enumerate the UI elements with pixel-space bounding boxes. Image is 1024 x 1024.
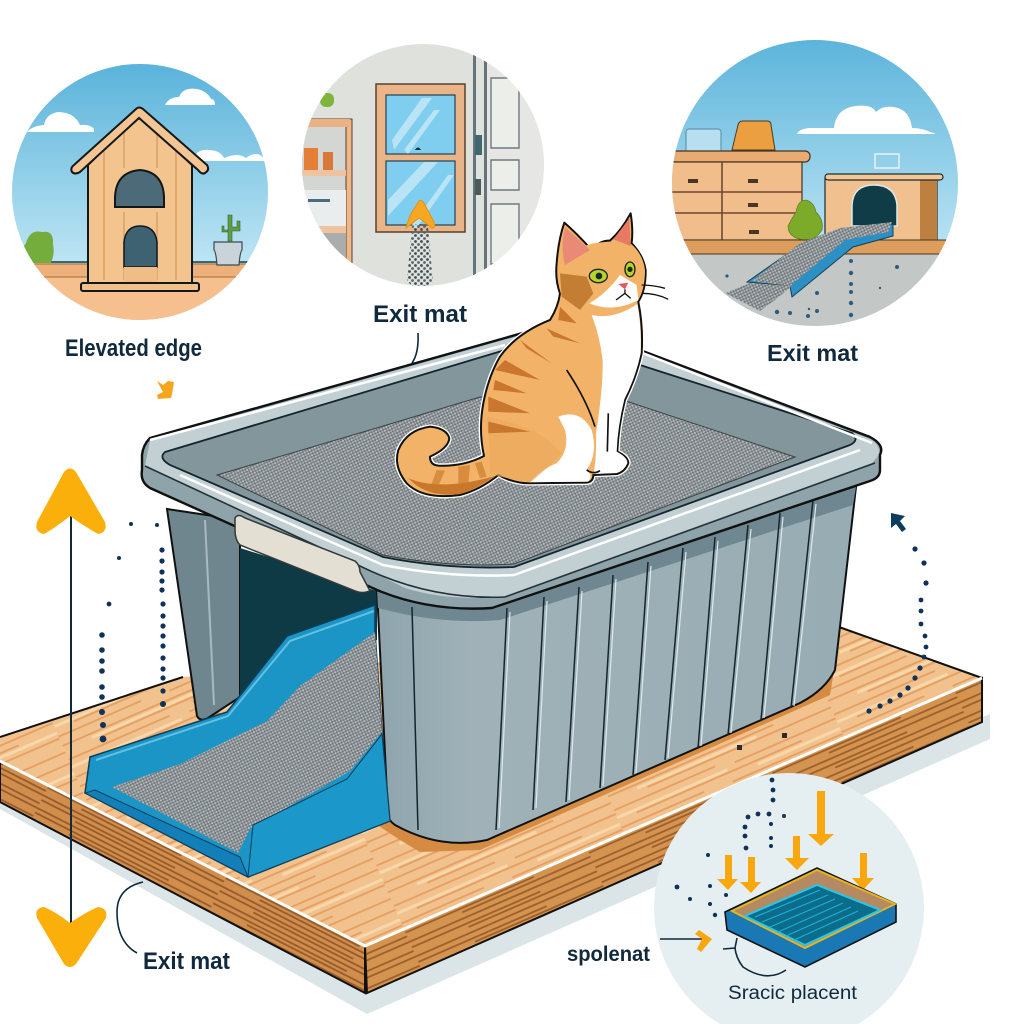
- litter crumbs: [737, 733, 787, 750]
- cat chest: [592, 304, 641, 474]
- cat outline: [397, 213, 646, 496]
- handle: [235, 516, 370, 592]
- interior walls: [162, 340, 856, 568]
- falling dots: [675, 778, 786, 917]
- blue tray: [725, 868, 896, 967]
- box front body: [377, 487, 856, 843]
- dark opening: [240, 548, 377, 700]
- drop arrows: [717, 791, 874, 893]
- icon: small orange arrow: [157, 381, 174, 399]
- pointer arrow to tray: [660, 930, 712, 952]
- dimension arrow: height: [36, 468, 106, 967]
- panel: mat placement inset: [654, 773, 924, 1024]
- label: elevated edge: Elevated edge: [65, 335, 202, 362]
- dotted path left: [99, 522, 166, 742]
- litter bed: [217, 397, 795, 565]
- dotted arrow right: [866, 513, 929, 714]
- label: exit mat bottom: Exit mat: [143, 948, 230, 975]
- litter box: [142, 321, 881, 843]
- shadow under box: [190, 665, 835, 852]
- rim outer: [142, 321, 881, 609]
- leader curve: bottom exit mat: [117, 882, 143, 953]
- cat haunch: [530, 414, 594, 482]
- leader line: top exit mat: [412, 333, 418, 363]
- panel: window and door inset: [300, 44, 557, 297]
- label: static placement: Sracic placent: [728, 983, 858, 1004]
- cat stripes: [488, 307, 580, 433]
- panel: dresser and ramp inset: [672, 40, 958, 326]
- rim top face: [145, 323, 879, 598]
- label: exit mat top: Exit mat: [373, 301, 467, 328]
- cat head: [558, 242, 645, 309]
- dark band beneath rim: [377, 487, 856, 621]
- panel: elevated house inset: [12, 64, 268, 320]
- label: exit mat right: Exit mat: [767, 340, 858, 366]
- cat eyes and nose: [589, 269, 607, 283]
- cat silhouette: [397, 213, 646, 496]
- cat: [397, 213, 668, 496]
- curved pointer: [723, 938, 786, 976]
- wooden platform: [0, 627, 990, 1014]
- label: spolenat: spolenat: [567, 943, 650, 966]
- blue exit ramp: [85, 605, 390, 877]
- box left wall: [167, 509, 240, 720]
